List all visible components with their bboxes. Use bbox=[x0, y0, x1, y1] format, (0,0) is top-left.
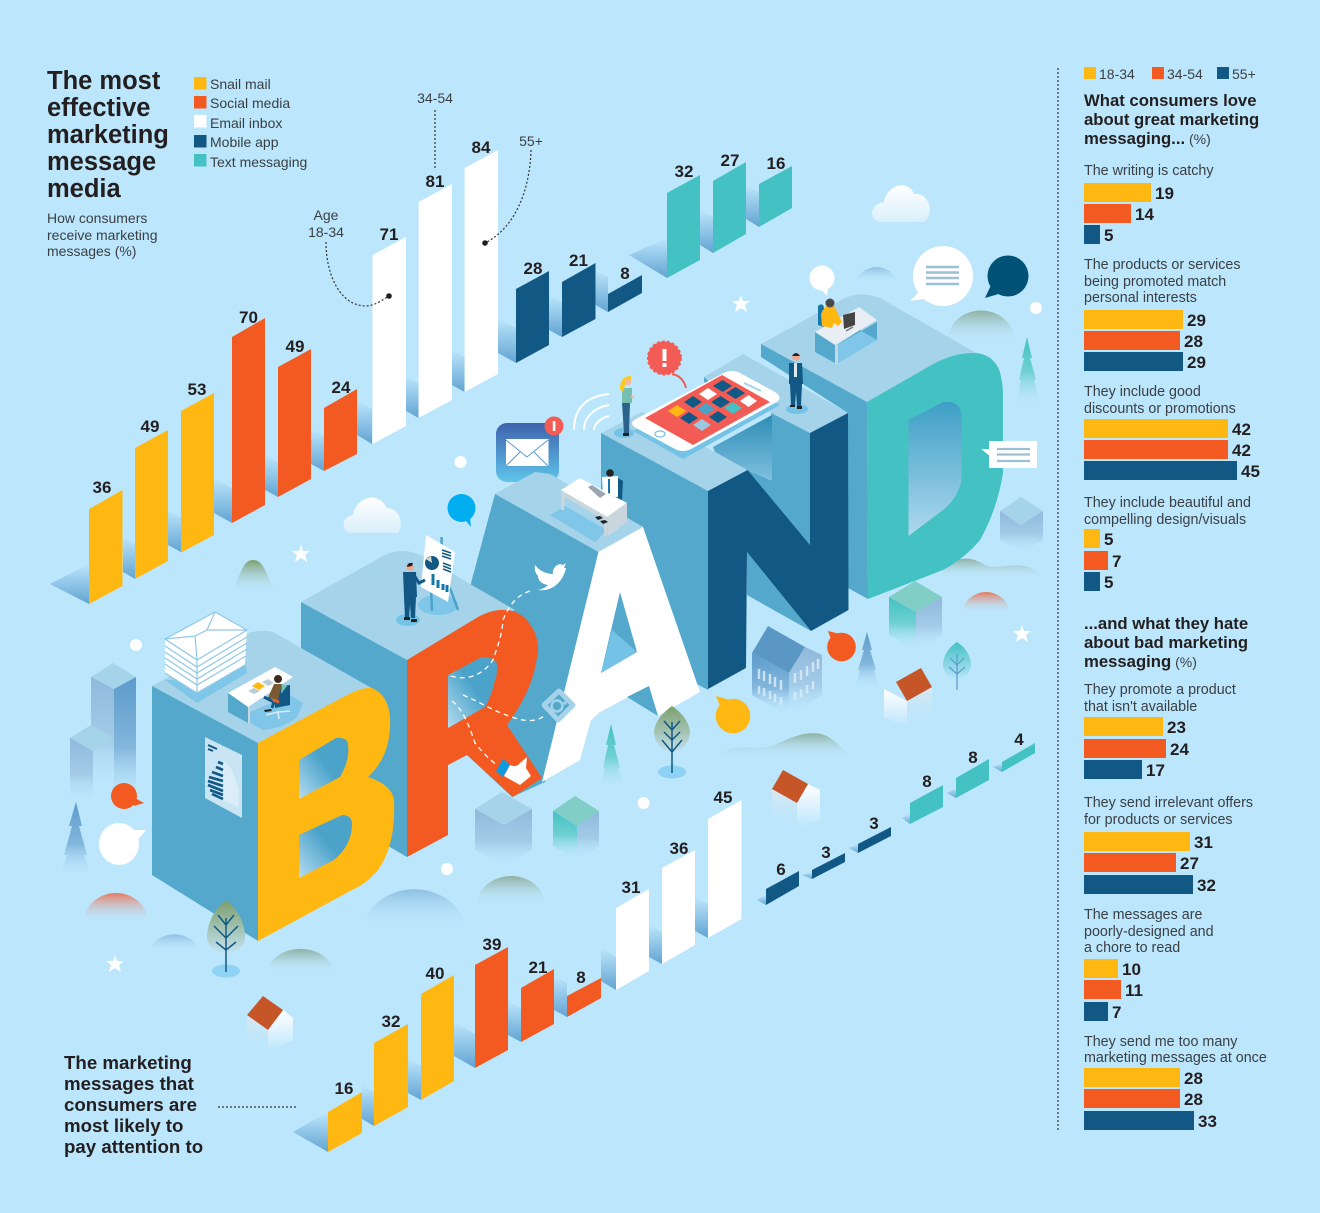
group: not available: 17 bbox=[1146, 761, 1165, 780]
heading: hate: about bad marketing bbox=[1084, 633, 1248, 652]
group: irrelevant offers: 31 bbox=[1194, 833, 1213, 852]
title block: message bbox=[47, 148, 156, 176]
group: personal interests: personal interests bbox=[1084, 290, 1197, 306]
text messaging bars: 8 bbox=[922, 772, 932, 791]
marketing bars top chart bbox=[50, 138, 642, 604]
group: personal interests bbox=[1084, 257, 1241, 372]
legend: media types bbox=[194, 76, 307, 170]
email inbox bars: 36 bbox=[670, 839, 688, 858]
group: writing is catchy: 19 bbox=[1155, 184, 1174, 203]
age annotations: 55+ bbox=[519, 133, 543, 149]
email inbox bars: 84 bbox=[472, 138, 491, 157]
group: design: They include beautiful and bbox=[1084, 495, 1251, 511]
title block bbox=[47, 67, 169, 259]
house centre bbox=[772, 770, 820, 828]
snail mail bars: 36 bbox=[93, 478, 111, 497]
phone bbox=[632, 371, 780, 459]
title block: The most bbox=[47, 67, 161, 95]
social media bars: 49 bbox=[286, 337, 304, 356]
group: too many: They send me too many bbox=[1084, 1034, 1238, 1050]
group: not available: that isn't available bbox=[1084, 699, 1197, 715]
easel with charts bbox=[418, 535, 458, 615]
group: discounts bbox=[1084, 384, 1260, 481]
email inbox bars: 71 bbox=[380, 225, 398, 244]
social media bars: 21 bbox=[529, 958, 547, 977]
bottom chart heading: most likely to bbox=[64, 1115, 183, 1136]
person: blonde woman bbox=[614, 376, 634, 438]
group: poorly designed: 10 bbox=[1122, 960, 1141, 979]
email inbox bars: 81 bbox=[426, 172, 444, 191]
group: poorly designed: 7 bbox=[1112, 1003, 1121, 1022]
group: design: 7 bbox=[1112, 552, 1121, 571]
mobile app bars: 3 bbox=[869, 814, 879, 833]
legend: media types: Snail mail bbox=[210, 76, 271, 92]
group: not available: 24 bbox=[1170, 740, 1189, 759]
mobile app bars: 6 bbox=[776, 860, 786, 879]
email inbox bars: 31 bbox=[622, 878, 640, 897]
snail mail bars bbox=[50, 380, 214, 604]
scenery: left fir tree bbox=[60, 802, 91, 878]
email inbox bars bbox=[601, 788, 742, 990]
group: writing is catchy: 14 bbox=[1135, 205, 1154, 224]
group: not available: 23 bbox=[1167, 718, 1186, 737]
group: irrelevant offers: 32 bbox=[1197, 876, 1216, 895]
letter R block bbox=[301, 551, 542, 857]
teal text-messaging bars top: 16 bbox=[767, 154, 785, 173]
person: presenter bbox=[396, 563, 425, 626]
text messaging bars: 4 bbox=[1014, 730, 1024, 749]
heading: hate: ...and what they hate bbox=[1084, 614, 1248, 633]
tree with green leaf bbox=[654, 706, 690, 778]
group: discounts: 45 bbox=[1241, 462, 1260, 481]
desk with worker on D bbox=[815, 298, 877, 365]
bottom chart heading bbox=[64, 1052, 298, 1157]
group: writing is catchy bbox=[1084, 163, 1214, 245]
group: personal interests: 28 bbox=[1184, 332, 1203, 351]
legend: media types: Mobile app bbox=[210, 134, 279, 150]
teal text-messaging bars top: 32 bbox=[675, 162, 693, 181]
title block: receive marketing bbox=[47, 227, 158, 243]
desk with woman on B bbox=[228, 667, 303, 730]
text messaging bars: 8 bbox=[968, 748, 978, 767]
scenery: ground hills, dots and stars bbox=[84, 456, 650, 973]
group: design bbox=[1084, 495, 1251, 592]
group: writing is catchy: 5 bbox=[1104, 226, 1113, 245]
social media bars bbox=[214, 308, 357, 523]
person: businessman with folded arms bbox=[786, 353, 808, 414]
group: personal interests: The products or services bbox=[1084, 257, 1241, 273]
icon: mail app bbox=[496, 416, 564, 482]
heading: hate: messaging (%) bbox=[1084, 652, 1197, 671]
mobile app bars: 21 bbox=[569, 251, 588, 270]
wifi arcs bbox=[574, 394, 609, 430]
bottom chart heading: The marketing bbox=[64, 1052, 192, 1073]
mobile app bars: 3 bbox=[821, 843, 831, 862]
legend: media types: Social media bbox=[210, 95, 290, 111]
speech bubble: small white over worker bbox=[810, 266, 834, 296]
speech bubble: orange bbox=[827, 631, 856, 661]
letter A block bbox=[467, 472, 700, 797]
social media bars: 24 bbox=[332, 378, 351, 397]
group: not available: They promote a product bbox=[1084, 682, 1236, 698]
rectangular speech bubble on D bbox=[981, 441, 1037, 468]
heading: love: messaging... (%) bbox=[1084, 129, 1211, 148]
snail mail bars: 16 bbox=[335, 1079, 353, 1098]
speech bubble: white left bbox=[99, 823, 146, 865]
icon: instagram diamond bbox=[544, 691, 573, 720]
letter N block bbox=[601, 354, 848, 690]
right panel: what consumers hate bbox=[1084, 614, 1267, 1131]
snail mail bars: 53 bbox=[188, 380, 206, 399]
dot bbox=[1030, 302, 1042, 314]
letter D block bbox=[761, 294, 1003, 599]
age annotations: Age bbox=[314, 207, 339, 223]
cloud: middle left bbox=[344, 497, 401, 533]
icon: thumbs up bbox=[496, 757, 531, 785]
title block: How consumers bbox=[47, 210, 147, 226]
heading: love bbox=[1084, 91, 1259, 148]
title block: media bbox=[47, 175, 122, 203]
heading: love: What consumers love bbox=[1084, 91, 1256, 110]
group: poorly designed: The messages are bbox=[1084, 907, 1202, 923]
speech bubble: blue bbox=[448, 494, 476, 527]
snail mail bars: 32 bbox=[382, 1012, 400, 1031]
group: design: 5 bbox=[1104, 530, 1113, 549]
group: design: 5 bbox=[1104, 573, 1113, 592]
teal text-messaging bars top: 27 bbox=[721, 151, 739, 170]
right panel legend: 18-34 bbox=[1099, 66, 1135, 82]
group: irrelevant offers: They send irrelevant offers bbox=[1084, 795, 1253, 811]
house bottom left bbox=[247, 996, 293, 1052]
speech bubble: dark teal bbox=[985, 256, 1028, 298]
stack of envelopes bbox=[165, 612, 247, 703]
icon: twitter bird bbox=[535, 563, 566, 590]
heading: hate bbox=[1084, 614, 1248, 671]
social media bars bbox=[454, 935, 601, 1068]
group: too many: 28 bbox=[1184, 1090, 1203, 1109]
building: blue house bbox=[752, 626, 822, 716]
alert badge bbox=[648, 342, 686, 388]
bottom chart heading: pay attention to bbox=[64, 1136, 203, 1157]
legend: media types: Email inbox bbox=[210, 115, 282, 131]
mobile app bars: 28 bbox=[524, 259, 542, 278]
social media bars: 8 bbox=[576, 968, 586, 987]
group: discounts: They include good bbox=[1084, 384, 1201, 400]
email inbox bars: 45 bbox=[714, 788, 732, 807]
group: writing is catchy: The writing is catchy bbox=[1084, 163, 1214, 179]
scenery: tree bottom left bbox=[207, 900, 245, 978]
group: irrelevant offers bbox=[1084, 795, 1253, 895]
cloud: upper right bbox=[872, 185, 930, 222]
mobile app bars bbox=[498, 251, 642, 363]
legend: media types: Text messaging bbox=[210, 154, 307, 170]
age annotations: 18-34 bbox=[308, 224, 344, 240]
mobile app bars bbox=[757, 814, 891, 905]
group: discounts: 42 bbox=[1232, 441, 1251, 460]
scenery: lower right, cube, hill and trees bbox=[717, 581, 1031, 758]
speech bubble: yellow bbox=[716, 696, 750, 733]
snail mail bars bbox=[293, 964, 454, 1152]
group: personal interests: 29 bbox=[1187, 311, 1206, 330]
group: too many: marketing messages at once bbox=[1084, 1050, 1267, 1066]
bottom chart heading: consumers are bbox=[64, 1094, 197, 1115]
poster on B block bbox=[205, 737, 242, 818]
group: discounts: discounts or promotions bbox=[1084, 401, 1236, 417]
title block: effective bbox=[47, 94, 150, 122]
speech bubble: orange left bbox=[111, 783, 144, 809]
group: personal interests: 29 bbox=[1187, 353, 1206, 372]
desk with man on laptop bbox=[550, 469, 627, 542]
mobile app bars: 8 bbox=[620, 264, 630, 283]
text messaging bars bbox=[902, 730, 1035, 824]
group: not available bbox=[1084, 682, 1236, 780]
group: personal interests: being promoted match bbox=[1084, 274, 1226, 290]
speech bubble: white with lines bbox=[910, 246, 973, 306]
group: poorly designed bbox=[1084, 907, 1214, 1022]
email inbox bars bbox=[357, 138, 498, 444]
group: irrelevant offers: for products or services bbox=[1084, 812, 1233, 828]
group: too many: 28 bbox=[1184, 1069, 1203, 1088]
vertical divider bbox=[1057, 68, 1059, 1130]
right panel legend bbox=[1084, 66, 1256, 82]
group: too many: 33 bbox=[1198, 1112, 1217, 1131]
snail mail bars: 49 bbox=[141, 417, 159, 436]
snail mail bars: 40 bbox=[426, 964, 444, 983]
heading: love: about great marketing bbox=[1084, 110, 1259, 129]
social media bars: 70 bbox=[239, 308, 258, 327]
scenery: upper right hills, trees and cube bbox=[732, 267, 1043, 578]
group: poorly designed: poorly-designed and bbox=[1084, 924, 1214, 940]
group: poorly designed: a chore to read bbox=[1084, 940, 1180, 956]
bottom chart heading: messages that bbox=[64, 1073, 194, 1094]
right panel legend: 34-54 bbox=[1167, 66, 1203, 82]
group: too many bbox=[1084, 1034, 1267, 1131]
group: design: compelling design/visuals bbox=[1084, 512, 1246, 528]
group: irrelevant offers: 27 bbox=[1180, 854, 1199, 873]
teal text-messaging bars top bbox=[629, 151, 792, 278]
social media bars: 39 bbox=[483, 935, 501, 954]
house right bbox=[884, 668, 932, 727]
letter B block bbox=[152, 631, 394, 941]
group: discounts: 42 bbox=[1232, 420, 1251, 439]
age annotations bbox=[308, 90, 543, 306]
title block: messages (%) bbox=[47, 243, 136, 259]
dashed social media connector lines bbox=[448, 591, 545, 765]
group: poorly designed: 11 bbox=[1125, 981, 1143, 1000]
scenery: grey and teal cubes bbox=[475, 792, 599, 867]
age annotations: 34-54 bbox=[417, 90, 453, 106]
right panel: what consumers love bbox=[1084, 91, 1260, 592]
scenery: left side buildings bbox=[70, 663, 136, 805]
right panel legend: 55+ bbox=[1232, 66, 1256, 82]
bottom bar chart: attention bbox=[293, 730, 1035, 1152]
title block: marketing bbox=[47, 121, 169, 149]
